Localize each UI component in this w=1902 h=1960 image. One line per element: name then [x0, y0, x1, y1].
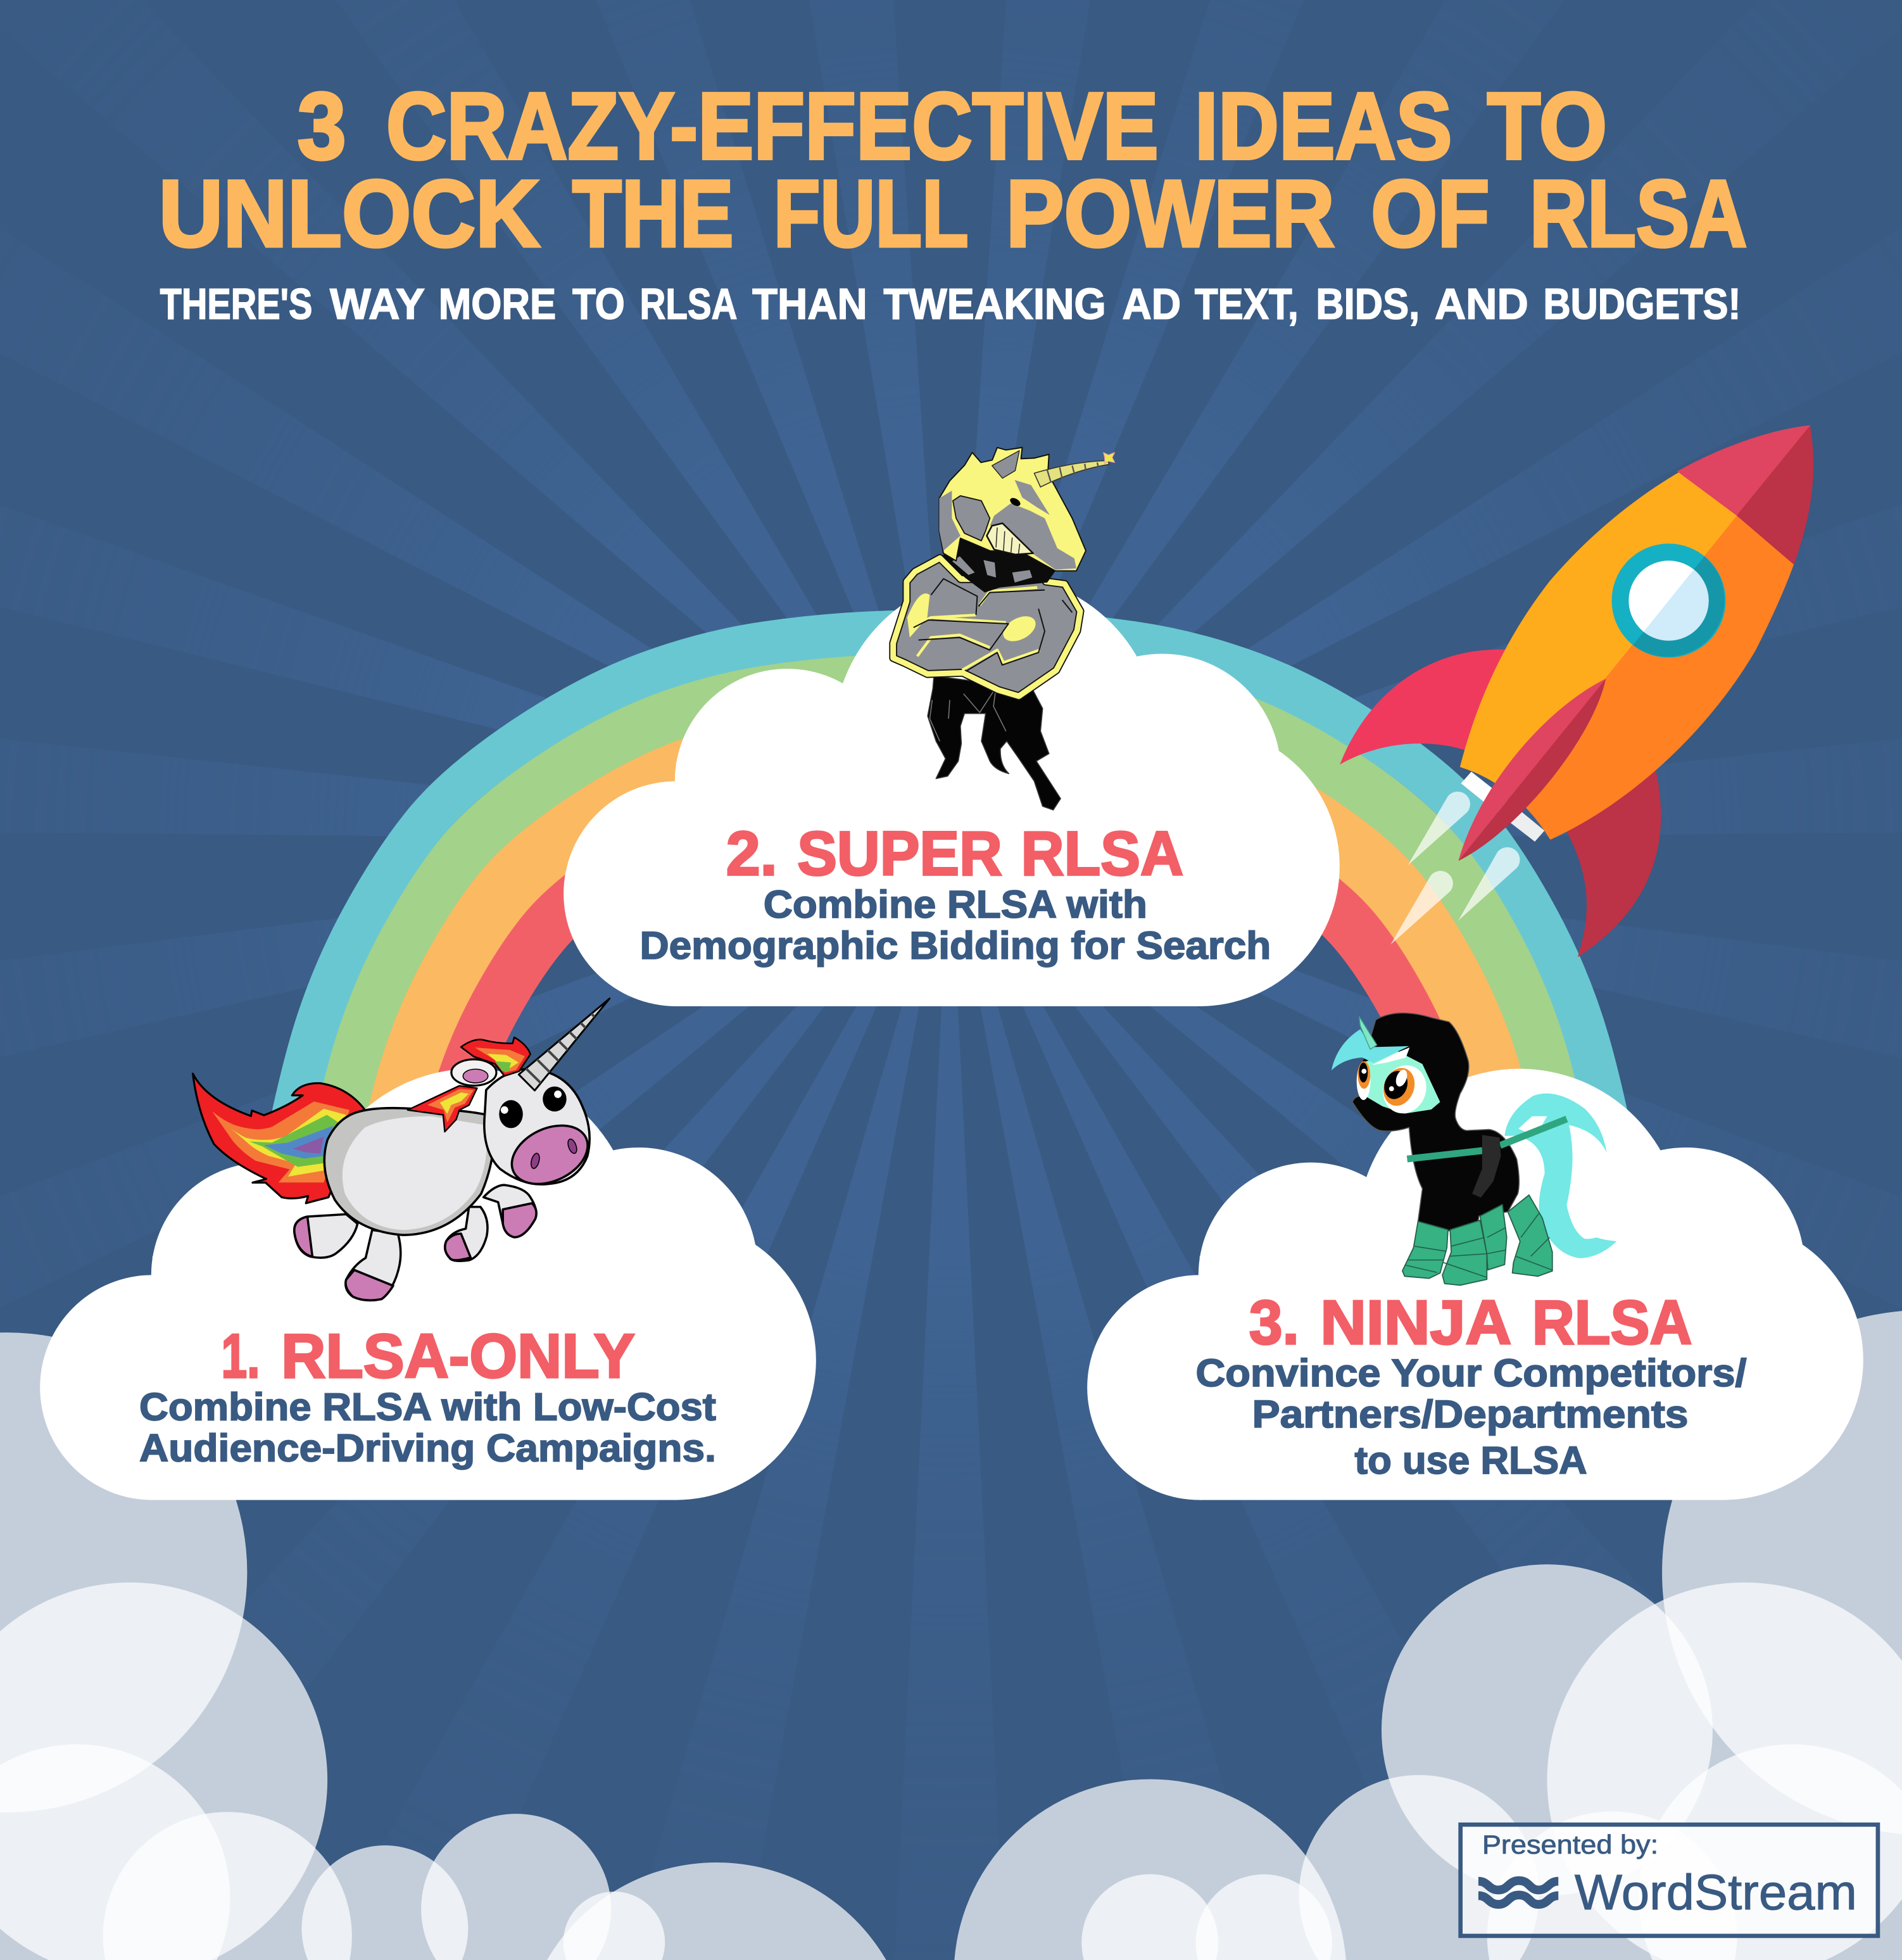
WordStream presented-by badge: [1461, 1824, 1878, 1936]
white cloud 3: [1087, 1069, 1863, 1500]
cloud 1 text: Combine RLSA with Low-Cost: [139, 1385, 716, 1428]
cloud 2 text: Demographic Bidding for Search: [640, 924, 1271, 967]
background sunburst rays: [219, 107, 1685, 1576]
title: [159, 73, 1747, 267]
cloud 3 text: Partners/Departments: [1252, 1393, 1688, 1436]
subtitle: BIDS,: [1316, 279, 1420, 328]
cloud 2 text: [640, 819, 1271, 967]
rocket exhaust flames: [1390, 792, 1520, 944]
cloud 2 text: RLSA: [1021, 819, 1183, 888]
icon: rocket: [1340, 426, 1813, 957]
bottom background clouds: left cluster: [0, 1332, 886, 1960]
title: FULL: [774, 160, 969, 267]
icon: muscular unicorn with crossed arms: [893, 448, 1115, 810]
subtitle: TWEAKING: [883, 279, 1106, 328]
title: THE: [572, 160, 734, 267]
subtitle: TO: [572, 279, 625, 328]
white cloud 2: [564, 575, 1340, 1006]
subtitle: THAN: [752, 279, 867, 328]
subtitle: WAY: [330, 279, 425, 328]
WordStream presented-by badge: WordStream: [1575, 1864, 1857, 1920]
rainbow arc: [271, 631, 1628, 1251]
title: RLSA: [1530, 160, 1747, 267]
cloud 1 text: [139, 1321, 716, 1469]
title: POWER: [1006, 160, 1335, 267]
cloud 1 text: 1.: [221, 1321, 260, 1391]
cloud 1 text: RLSA-ONLY: [281, 1321, 635, 1391]
subtitle: AND: [1435, 279, 1528, 328]
cloud 3 text: to use RLSA: [1355, 1439, 1587, 1482]
subtitle: THERE'S: [160, 279, 312, 328]
subtitle: BUDGETS!: [1544, 279, 1741, 328]
cloud 2 text: SUPER: [797, 819, 1002, 888]
subtitle: TEXT,: [1195, 279, 1299, 328]
subtitle: RLSA: [640, 279, 737, 328]
bottom background clouds: right cluster: [954, 1310, 1902, 1960]
white cloud 1: [40, 1069, 816, 1500]
cloud 1 text: Audience-Driving Campaigns.: [139, 1426, 716, 1469]
cloud 3 text: Convince Your Competitors/: [1195, 1351, 1746, 1394]
subtitle: MORE: [439, 279, 556, 328]
cloud 3 text: 3.: [1249, 1287, 1299, 1357]
cloud 3 text: RLSA: [1532, 1287, 1692, 1357]
subtitle: [160, 279, 1741, 328]
title: IDEAS: [1195, 73, 1452, 179]
cloud 3 text: NINJA: [1320, 1287, 1511, 1357]
title: 3: [298, 73, 346, 179]
cloud 2 text: Combine RLSA with: [764, 883, 1147, 926]
title: OF: [1371, 160, 1490, 267]
icon: chubby rainbow unicorn: [193, 999, 610, 1300]
icon: ninja pony: [1332, 1013, 1616, 1286]
cloud 3 text: [1195, 1287, 1746, 1482]
title: TO: [1487, 73, 1607, 179]
title: CRAZY-EFFECTIVE: [386, 73, 1159, 179]
subtitle: AD: [1122, 279, 1181, 328]
WordStream presented-by badge: Presented by:: [1482, 1830, 1658, 1859]
title: UNLOCK: [159, 160, 540, 267]
cloud 2 text: 2.: [726, 819, 778, 888]
